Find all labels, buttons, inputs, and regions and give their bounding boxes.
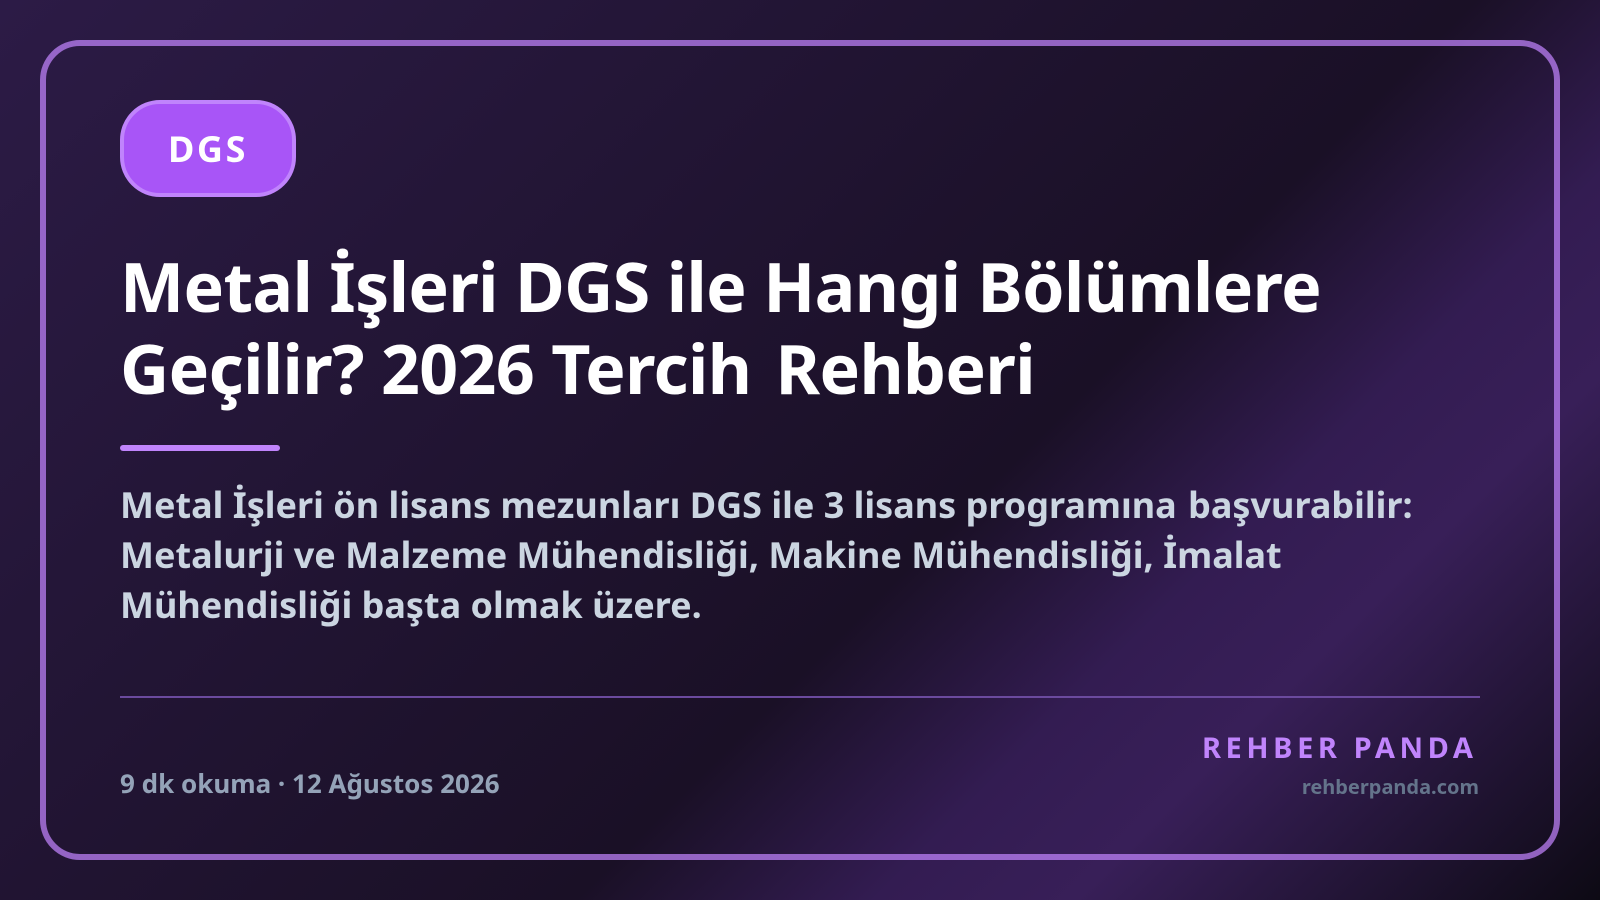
reading time and date: 9 dk okuma · 12 Ağustos 2026 bbox=[120, 765, 500, 801]
footer divider bbox=[120, 696, 1480, 698]
brand url: rehberpanda.com bbox=[1302, 773, 1479, 800]
brand block bbox=[1202, 728, 1479, 800]
description: Mühendisliği başta olmak üzere. bbox=[120, 580, 702, 629]
description bbox=[120, 480, 1413, 629]
title bbox=[120, 239, 1321, 414]
accent bar bbox=[120, 445, 280, 451]
title: Geçilir? 2026 Tercih Rehberi bbox=[120, 321, 1035, 414]
badge: DGS bbox=[120, 100, 296, 197]
brand name: REHBER PANDA bbox=[1202, 728, 1478, 767]
description: Metalurji ve Malzeme Mühendisliği, Makine Mühendisliği, İmalat bbox=[120, 530, 1282, 579]
badge: DGS: DGS bbox=[168, 124, 248, 173]
title: Metal İşleri DGS ile Hangi Bölümlere bbox=[120, 239, 1321, 332]
description: Metal İşleri ön lisans mezunları DGS ile 3 lisans programına başvurabilir: bbox=[120, 480, 1413, 529]
